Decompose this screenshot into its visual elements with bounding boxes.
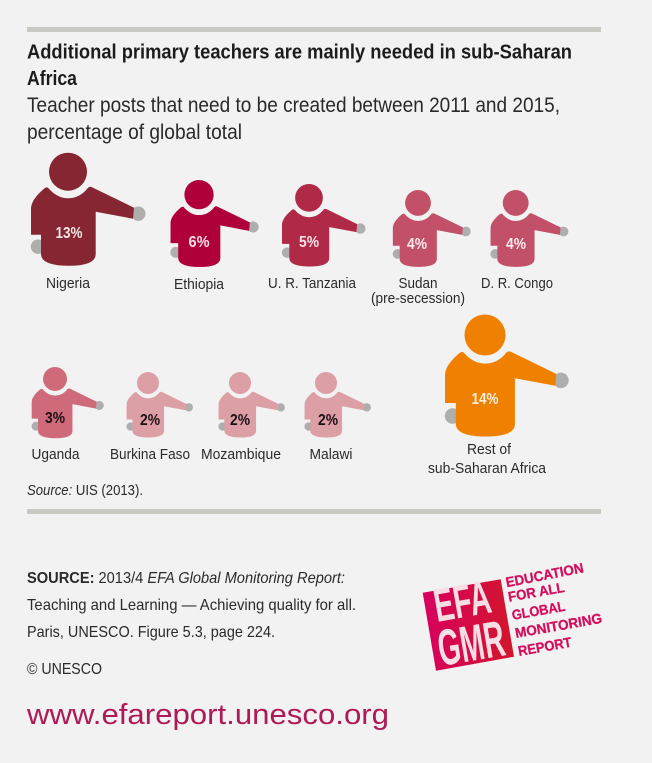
figure: Rest of sub-Saharan Africa 14% bbox=[428, 314, 569, 477]
subtitle: Teacher posts that need to be created between 2011 and 2015, bbox=[27, 94, 560, 117]
figure: Mozambique 2% bbox=[201, 372, 285, 463]
top rule bbox=[27, 27, 601, 32]
figure: Malawi 2%: 2% bbox=[318, 412, 338, 429]
figure: Sudan 4%: 4% bbox=[407, 236, 427, 253]
chart source note: Source: UIS (2013). bbox=[27, 483, 143, 499]
figure: Ethiopia 6% bbox=[170, 180, 259, 293]
figure: Ethiopia 6%: 6% bbox=[188, 234, 210, 251]
logo: EFA GMR: GMR bbox=[433, 610, 509, 677]
title bbox=[27, 42, 572, 90]
figure: Uganda 3%: Uganda bbox=[32, 446, 80, 463]
logo: EFA GMR: FOR ALL bbox=[507, 579, 566, 605]
figure: Nigeria 13% bbox=[31, 153, 145, 292]
logo: EFA GMR: MONITORING bbox=[514, 610, 603, 641]
figure: Ethiopia 6%: Ethiopia bbox=[174, 276, 225, 293]
figure: D. R. Congo 4% bbox=[481, 190, 568, 292]
figure: D. R. Congo 4%: D. R. Congo bbox=[481, 275, 553, 292]
subtitle: percentage of global total bbox=[27, 121, 242, 144]
logo: EFA GMR: EDUCATION bbox=[504, 559, 585, 590]
figure: Mozambique 2%: 2% bbox=[230, 412, 250, 429]
figure: Uganda 3%: 3% bbox=[45, 410, 65, 427]
figure: Nigeria 13%: Nigeria bbox=[46, 275, 91, 292]
subtitle bbox=[27, 94, 560, 144]
title: Africa bbox=[27, 68, 78, 90]
figure: U. R. Tanzania 5% bbox=[268, 184, 366, 292]
figure: Nigeria 13%: 13% bbox=[56, 225, 82, 242]
citation block bbox=[27, 570, 356, 678]
citation block: © UNESCO bbox=[27, 661, 102, 678]
figure: Sudan 4% bbox=[371, 190, 471, 307]
figure: Mozambique 2%: Mozambique bbox=[201, 446, 281, 463]
citation block: Teaching and Learning — Achieving quality for all. bbox=[27, 597, 356, 614]
citation block: Paris, UNESCO. Figure 5.3, page 224. bbox=[27, 624, 275, 641]
figure: U. R. Tanzania 5%: U. R. Tanzania bbox=[268, 275, 357, 292]
logo: EFA GMR: EFA bbox=[430, 570, 495, 632]
figure: Rest of sub-Saharan Africa 14%: Rest of bbox=[467, 441, 512, 458]
figure: Malawi 2%: Malawi bbox=[310, 446, 352, 463]
figure: Burkina Faso 2%: Burkina Faso bbox=[110, 446, 190, 463]
figure: Rest of sub-Saharan Africa 14%: 14% bbox=[472, 391, 498, 408]
figure: Rest of sub-Saharan Africa 14%: sub-Saharan Africa bbox=[428, 460, 547, 477]
figure: Sudan 4%: (pre-secession) bbox=[371, 290, 465, 307]
logo: EFA GMR bbox=[423, 559, 603, 677]
logo: EFA GMR: REPORT bbox=[517, 634, 573, 659]
citation block: SOURCE: 2013/4 EFA Global Monitoring Report: bbox=[27, 570, 345, 587]
website url: www.efareport.unesco.org bbox=[26, 699, 389, 731]
figure: Burkina Faso 2% bbox=[110, 372, 193, 463]
bottom rule bbox=[27, 509, 601, 514]
figure: D. R. Congo 4%: 4% bbox=[506, 236, 526, 253]
figure: U. R. Tanzania 5%: 5% bbox=[299, 234, 319, 251]
figure: Sudan 4%: Sudan bbox=[398, 275, 438, 292]
figure: Burkina Faso 2%: 2% bbox=[140, 412, 160, 429]
figure: Uganda 3% bbox=[32, 367, 104, 463]
title: Additional primary teachers are mainly needed in sub-Saharan bbox=[27, 42, 572, 64]
logo: EFA GMR: GLOBAL bbox=[510, 598, 567, 623]
figure: Malawi 2% bbox=[304, 372, 371, 463]
